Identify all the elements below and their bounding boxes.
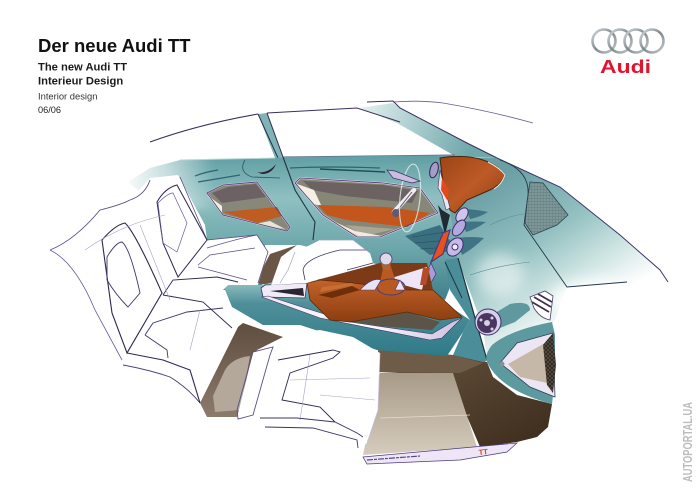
- date: 06/06: [38, 105, 61, 115]
- subheading: The new Audi TT: [38, 62, 127, 74]
- round dash vent: [495, 303, 530, 330]
- watermark: AUTOPORTAL.UA: [680, 402, 695, 482]
- Audi logo: [592, 30, 664, 77]
- instrument binnacle: [428, 156, 505, 235]
- dashboard: [445, 157, 677, 364]
- subheading line two: Interieur Design: [38, 76, 123, 88]
- driver seat: [237, 330, 380, 450]
- rear seat bench: [50, 175, 268, 403]
- dash column: [445, 258, 487, 364]
- round vents stack: [444, 206, 488, 259]
- gauges under binnacle: [438, 170, 450, 210]
- rear door window panel: [207, 182, 290, 231]
- wordmark: Audi: [600, 57, 651, 77]
- floor: [200, 245, 552, 455]
- door sill with TT badge: TT: [478, 447, 489, 457]
- car interior sketch: [50, 101, 677, 464]
- side vent slats: [530, 291, 553, 320]
- centre screen: [422, 230, 450, 288]
- description: Interior design: [38, 90, 97, 102]
- seat cushions: [163, 277, 238, 328]
- centre console: [223, 253, 470, 356]
- dark air outlet stripes: [405, 225, 455, 255]
- main heading: Der neue Audi TT: [38, 35, 191, 56]
- left seat back outlines: [102, 223, 162, 353]
- gear lever: [380, 264, 396, 282]
- icon: four rings: [592, 30, 664, 52]
- passenger seat: [271, 240, 373, 285]
- right seat back outlines: [157, 185, 207, 277]
- speaker grille: [525, 182, 568, 235]
- chrome trim: [261, 283, 307, 298]
- icon: door handle: [394, 190, 414, 212]
- door sill with TT badge: [363, 443, 517, 464]
- vent and glovebox area: [475, 291, 553, 335]
- title block: [38, 35, 191, 115]
- glovebox opening: [486, 322, 556, 404]
- orange console pad: [307, 280, 462, 322]
- footwell behind front seat: [255, 245, 297, 285]
- roof and windows: [150, 101, 533, 158]
- side wall panel: [110, 150, 470, 300]
- front door window panel: [295, 163, 438, 237]
- rear footwell: [200, 323, 283, 417]
